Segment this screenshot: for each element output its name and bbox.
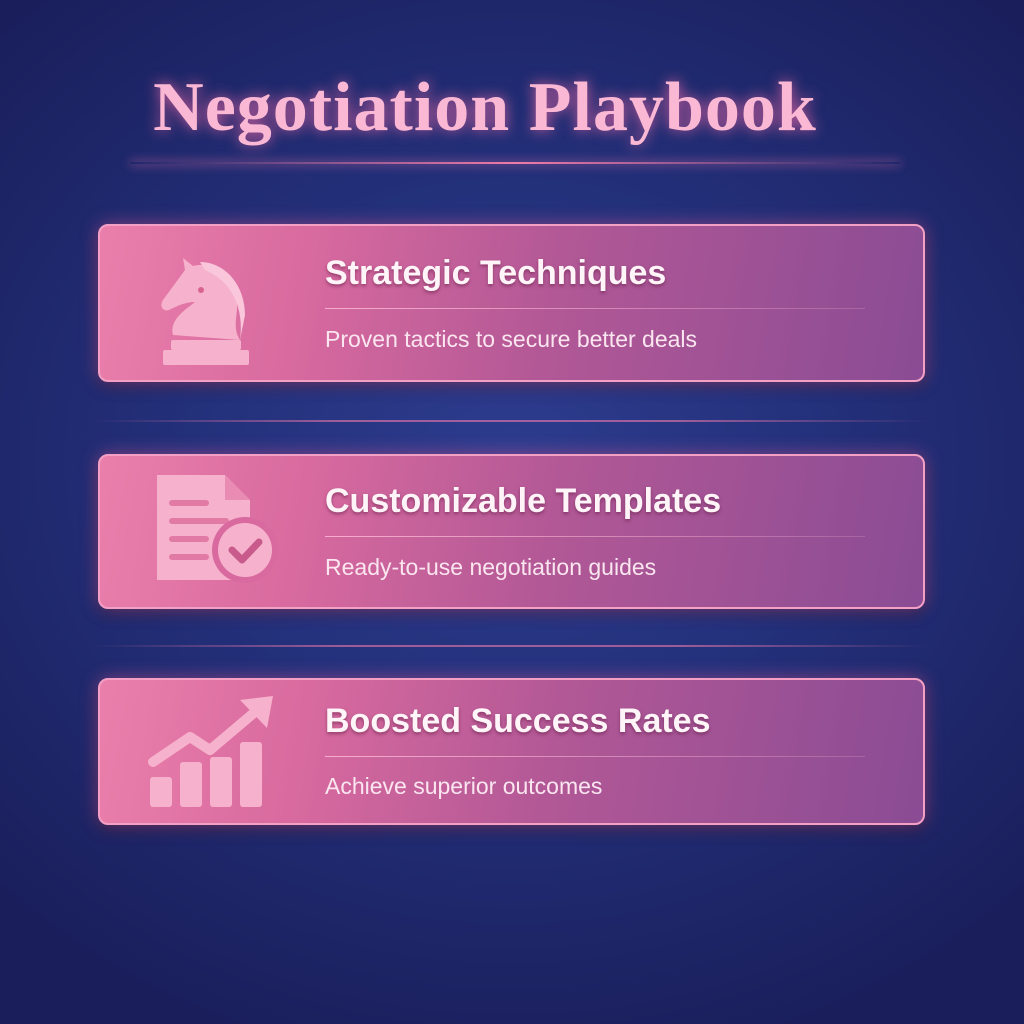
card: strategic techniques: Proven tactics to secure better deals: [325, 326, 697, 352]
card: customizable templates: Ready-to-use negotiation guides: [325, 554, 656, 580]
card: strategic techniques: [98, 224, 925, 382]
card: customizable templates: [98, 454, 925, 609]
card: boosted success rates: [98, 678, 925, 825]
card: boosted success rates: Boosted Success Rates: [325, 702, 710, 740]
title: Negotiation Playbook: [153, 69, 817, 146]
icon: growth chart: [148, 696, 273, 807]
card: boosted success rates: Achieve superior outcomes: [325, 773, 602, 799]
card: strategic techniques: Strategic Techniques: [325, 254, 666, 292]
card: customizable templates: Customizable Templates: [325, 482, 721, 520]
icon: chess knight: [161, 258, 249, 365]
icon: document with check: [157, 475, 272, 580]
